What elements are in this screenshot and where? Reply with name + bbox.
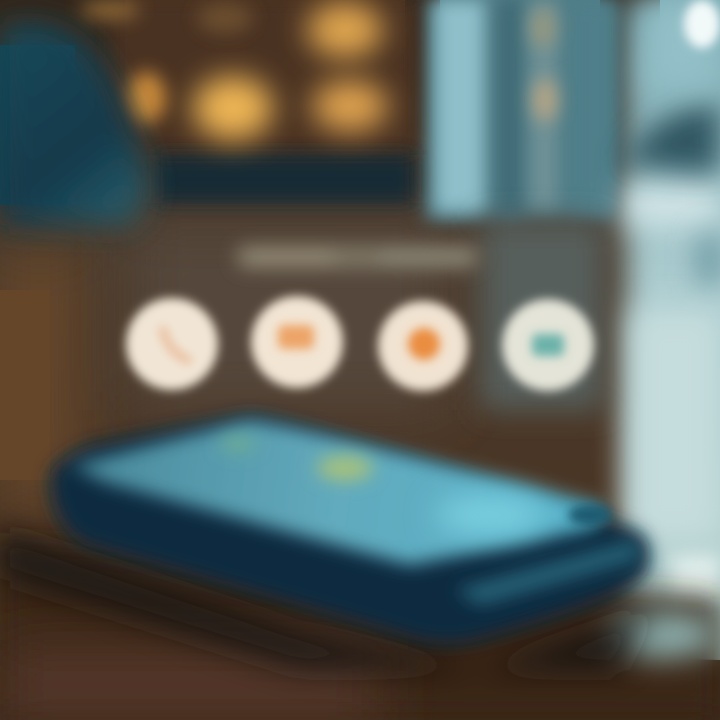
icon: message circle	[251, 296, 343, 388]
phone lying on table	[0, 415, 650, 670]
background: shelves with warm lights	[80, 0, 557, 203]
screen icon: green	[220, 437, 256, 451]
screen button	[568, 504, 612, 526]
icon: phone circle	[126, 298, 218, 390]
phone screen	[72, 420, 603, 565]
phone body	[50, 415, 650, 644]
foreground: wooden table	[0, 545, 720, 720]
phone shadow	[0, 530, 650, 670]
background: teal chair at left	[0, 23, 150, 225]
icon row	[126, 296, 594, 391]
phone side highlight	[455, 540, 642, 605]
icon: teal mail circle	[502, 299, 594, 391]
screen highlight	[435, 495, 545, 535]
screen icon: yellow-green	[317, 456, 373, 480]
icon: orange star circle	[378, 301, 468, 391]
heading band (illegible blurred title)	[235, 245, 480, 269]
background: right window area	[425, 0, 720, 720]
